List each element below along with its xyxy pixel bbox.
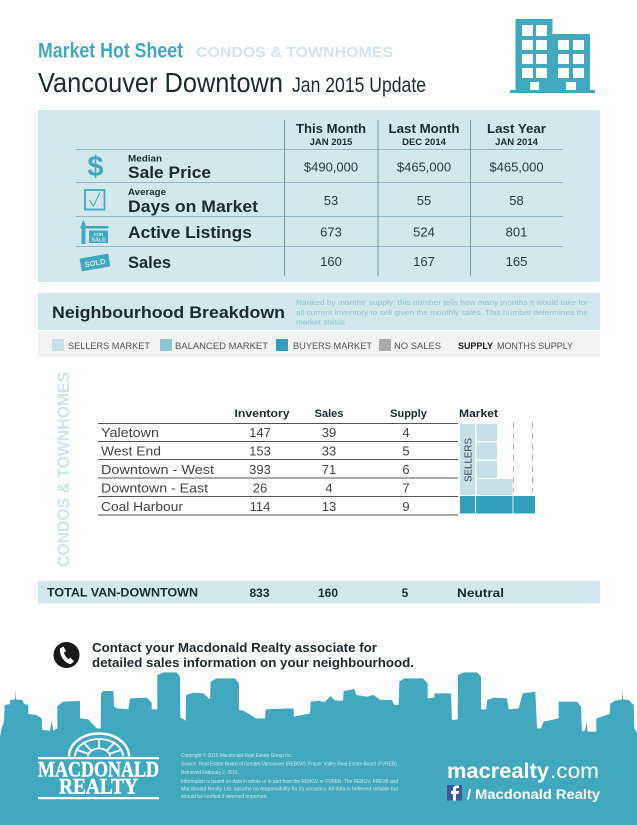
table header row: Sales bbox=[315, 408, 343, 420]
row values: active listings: 673 bbox=[320, 224, 342, 240]
logo: macdonald realty: MACDONALD bbox=[38, 756, 159, 782]
row values: days on market: 55 bbox=[417, 193, 431, 208]
table header row: Supply bbox=[390, 408, 428, 420]
legend: NO SALES bbox=[394, 341, 441, 352]
row: coal harbour: 114 bbox=[250, 499, 270, 514]
total row: TOTAL VAN-DOWNTOWN bbox=[47, 588, 198, 600]
copyright text: Source: Real Estate Board of Greater Vancouver (REBGV); Fraser Valley Real Estate Board (FVREB). bbox=[181, 762, 398, 768]
icon: sold tag bbox=[80, 254, 110, 271]
logo: macdonald realty bbox=[38, 734, 159, 799]
column header: last month: Last Month bbox=[388, 122, 460, 136]
heading: vancouver downtown: Vancouver Downtown bbox=[38, 67, 283, 98]
row: downtown east: 7 bbox=[402, 480, 410, 496]
row: west end: West End bbox=[101, 444, 161, 458]
row values: sales: 160 bbox=[320, 254, 342, 269]
row: downtown east: Downtown - East bbox=[101, 480, 208, 496]
row: yaletown: Yaletown bbox=[101, 425, 159, 440]
icon: phone bbox=[54, 642, 80, 668]
row label: average days on market: Average bbox=[128, 187, 166, 197]
icon: checkbox bbox=[85, 190, 104, 210]
row: yaletown: 4 bbox=[402, 425, 410, 440]
row values: sale price: $465,000 bbox=[489, 160, 544, 174]
logo: macdonald realty: REALTY bbox=[59, 774, 138, 798]
row values: active listings: 524 bbox=[413, 224, 435, 240]
contact text bbox=[92, 641, 414, 670]
icon: for sale sign bbox=[80, 220, 108, 244]
row label: sales: Sales bbox=[128, 254, 171, 272]
row: downtown east bbox=[101, 480, 410, 496]
legend: BALANCED MARKET bbox=[175, 341, 268, 352]
heading: vancouver downtown: Jan 2015 Update bbox=[292, 74, 426, 97]
icon: for sale sign: SALE bbox=[91, 238, 106, 244]
copyright text: Macdonald Realty Ltd. assume no responsibility for its accuracy. All data is believed reliable but bbox=[181, 786, 399, 792]
row: coal harbour bbox=[101, 499, 410, 514]
column header: last year bbox=[487, 122, 546, 148]
website: macrealty.com: macrealty bbox=[447, 760, 549, 783]
row: downtown west: 393 bbox=[249, 462, 271, 477]
skyline footer bbox=[0, 672, 637, 825]
total row: 833 bbox=[249, 586, 270, 600]
column header: last month bbox=[388, 122, 460, 148]
panel: monthly summary table bbox=[38, 110, 600, 282]
legend: BUYERS MARKET bbox=[293, 341, 372, 352]
chart: market bars bbox=[460, 422, 535, 514]
row: downtown west: 6 bbox=[402, 462, 410, 477]
table header row: Market bbox=[459, 408, 498, 420]
column header: this month: JAN 2015 bbox=[310, 137, 353, 148]
column header: this month: This Month bbox=[296, 122, 366, 136]
row: downtown west: Downtown - West bbox=[101, 462, 214, 477]
row values: days on market bbox=[324, 193, 524, 208]
panel: neighbourhood breakdown header bbox=[38, 293, 600, 330]
contact text: Contact your Macdonald Realty associate for bbox=[92, 641, 377, 655]
row values: active listings: 801 bbox=[506, 224, 527, 240]
icon: buildings bbox=[510, 19, 595, 93]
copyright text: Information is based on data in whole or in part from the REBGV or FVREB. The REBGV, FREVB and bbox=[181, 779, 398, 785]
contact text: detailed sales information on your neighbourhood. bbox=[92, 656, 414, 670]
row: west end: 5 bbox=[402, 444, 410, 458]
row label: median sale price: Median bbox=[128, 154, 162, 164]
row label: average days on market: Days on Market bbox=[128, 198, 259, 216]
column header: last year: JAN 2014 bbox=[495, 137, 539, 148]
social: macdonald realty: / Macdonald Realty bbox=[467, 787, 601, 802]
row label: median sale price: Sale Price bbox=[128, 164, 211, 182]
icon: dollar sign: $ bbox=[87, 151, 104, 183]
heading: neighbourhood breakdown: Neighbourhood Breakdown bbox=[52, 303, 285, 322]
row label: median sale price bbox=[128, 154, 211, 182]
row: west end bbox=[101, 444, 410, 458]
legend: SELLERS MARKET bbox=[68, 341, 150, 352]
row: coal harbour: Coal Harbour bbox=[101, 499, 184, 514]
total row: 5 bbox=[402, 586, 409, 600]
row: west end: 153 bbox=[249, 444, 271, 458]
copyright text bbox=[181, 752, 399, 800]
row: downtown east: 26 bbox=[253, 480, 267, 496]
row values: sale price: $490,000 bbox=[304, 160, 358, 174]
row values: sale price bbox=[304, 160, 544, 174]
total row bbox=[38, 581, 600, 604]
description text bbox=[296, 298, 589, 326]
row values: sales bbox=[320, 254, 527, 269]
legend: SUPPLY bbox=[458, 341, 494, 352]
website: macrealty.com: .com bbox=[550, 760, 599, 783]
row values: sales: 167 bbox=[413, 254, 435, 269]
row: coal harbour: 9 bbox=[402, 499, 410, 514]
description text: Ranked by months' supply; this number tells how many months it would take for bbox=[296, 298, 589, 307]
table header row: Inventory bbox=[234, 408, 290, 420]
website: macrealty.com bbox=[447, 760, 599, 783]
total row: Neutral bbox=[457, 586, 504, 600]
row: yaletown: 39 bbox=[322, 425, 336, 440]
title: market hot sheet bbox=[38, 40, 393, 62]
vertical label: condos and townhomes: CONDOS & TOWNHOMES bbox=[55, 372, 73, 567]
total row: 160 bbox=[318, 586, 338, 600]
column header: this month bbox=[296, 122, 366, 148]
title: market hot sheet: CONDOS & TOWNHOMES bbox=[196, 44, 393, 61]
row: coal harbour: 13 bbox=[322, 499, 336, 514]
copyright text: should be verified if deemed important. bbox=[181, 794, 268, 800]
row values: days on market: 58 bbox=[509, 193, 524, 208]
label: sellers: SELLERS bbox=[462, 438, 474, 482]
icon: facebook bbox=[447, 785, 462, 800]
row label: average days on market bbox=[128, 187, 259, 216]
row values: sale price: $465,000 bbox=[397, 160, 451, 174]
table: neighbourhood data bbox=[98, 408, 498, 515]
row: yaletown bbox=[101, 425, 410, 440]
legend bbox=[38, 331, 600, 357]
heading: vancouver downtown bbox=[38, 67, 426, 98]
row: downtown west bbox=[101, 462, 410, 477]
description text: all current inventory to sell given the monthly sales. This number determines the bbox=[296, 308, 588, 317]
row values: active listings bbox=[320, 224, 527, 240]
legend: MONTHS SUPPLY bbox=[497, 341, 574, 352]
row: yaletown: 147 bbox=[249, 425, 271, 440]
description text: market status bbox=[296, 318, 345, 326]
row: downtown west: 71 bbox=[322, 462, 336, 477]
row: downtown east: 4 bbox=[325, 480, 333, 496]
row: west end: 33 bbox=[322, 444, 336, 458]
column header: last month: DEC 2014 bbox=[402, 137, 447, 148]
copyright text: Copyright © 2015 Macdonald Real Estate Group Inc. bbox=[181, 752, 293, 759]
icon: sold tag: SOLD bbox=[84, 257, 107, 269]
row values: days on market: 53 bbox=[324, 193, 338, 208]
row label: active listings: Active Listings bbox=[128, 224, 252, 242]
column header: last year: Last Year bbox=[487, 122, 546, 136]
title: market hot sheet: Market Hot Sheet bbox=[38, 40, 183, 62]
icon: for sale sign: FOR bbox=[94, 232, 104, 237]
copyright text: Retrieved February 2, 2015. bbox=[181, 770, 239, 776]
row values: sales: 165 bbox=[506, 254, 527, 269]
table header row bbox=[234, 408, 498, 420]
